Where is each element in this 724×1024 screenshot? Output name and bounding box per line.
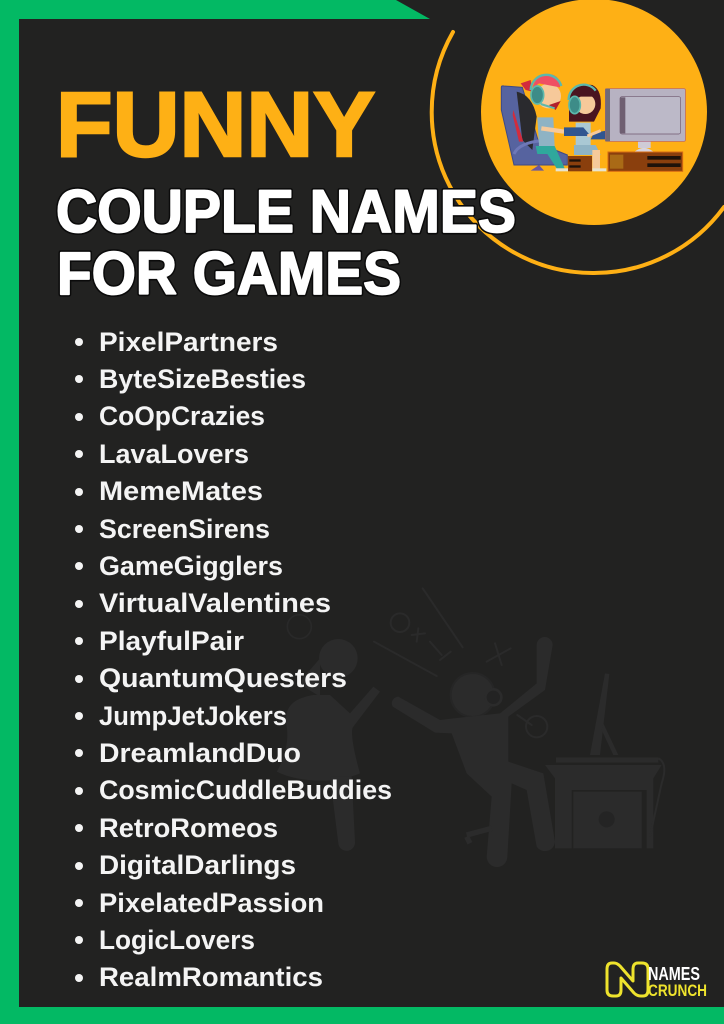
watermark: angry gamers silhouette bbox=[277, 588, 664, 867]
decorative orange ring bbox=[432, 32, 724, 273]
logo text: NAMES: NAMES bbox=[648, 964, 700, 984]
watermark: raging gamer bbox=[392, 637, 555, 867]
icon: male gamer bbox=[531, 75, 570, 171]
list item 7: GameGigglers bbox=[99, 551, 283, 581]
logo text: CRUNCH: CRUNCH bbox=[648, 981, 707, 1000]
orange circle bbox=[481, 0, 707, 225]
icon: N logo mark bbox=[607, 963, 648, 996]
list item 8: VirtualValentines bbox=[99, 588, 331, 618]
list item 3: CoOpCrazies bbox=[99, 401, 265, 431]
list of couple names bbox=[75, 327, 392, 992]
list item 5: MemeMates bbox=[99, 476, 263, 506]
list item 16: PixelatedPassion bbox=[99, 888, 324, 918]
list item 17: LogicLovers bbox=[99, 925, 255, 955]
list item 11: JumpJetJokers bbox=[99, 701, 287, 731]
list item 15: DigitalDarlings bbox=[99, 850, 296, 880]
watermark: pencil and symbols bbox=[374, 588, 547, 737]
list item 6: ScreenSirens bbox=[99, 514, 270, 544]
list item 1: PixelPartners bbox=[99, 327, 278, 357]
logo: Names Crunch bbox=[607, 963, 707, 1000]
list item 12: DreamlandDuo bbox=[99, 738, 301, 768]
list item 18: RealmRomantics bbox=[99, 962, 323, 992]
list item 4: LavaLovers bbox=[99, 439, 249, 469]
watermark: desk and monitor bbox=[545, 673, 664, 848]
heading: COUPLE NAMES: COUPLE NAMES bbox=[56, 178, 516, 245]
list item 14: RetroRomeos bbox=[99, 813, 278, 843]
illustration: couple gaming bbox=[501, 75, 685, 171]
icon: desk drawers bbox=[568, 152, 683, 171]
heading: FUNNY: FUNNY bbox=[56, 74, 375, 176]
icon: gaming chair bbox=[501, 80, 567, 171]
list item 10: QuantumQuesters bbox=[99, 663, 347, 693]
heading: FOR GAMES: FOR GAMES bbox=[57, 240, 401, 307]
title bbox=[56, 74, 516, 307]
list item 9: PlayfulPair bbox=[99, 626, 245, 656]
icon: monitor bbox=[605, 89, 685, 152]
heading: FOR GAMES: FOR GAMES bbox=[57, 240, 401, 307]
icon: female gamer bbox=[564, 85, 607, 171]
list item 2: ByteSizeBesties bbox=[99, 364, 306, 394]
watermark: standing woman bbox=[277, 615, 380, 851]
list item 13: CosmicCuddleBuddies bbox=[99, 775, 392, 805]
heading: COUPLE NAMES: COUPLE NAMES bbox=[56, 178, 516, 245]
